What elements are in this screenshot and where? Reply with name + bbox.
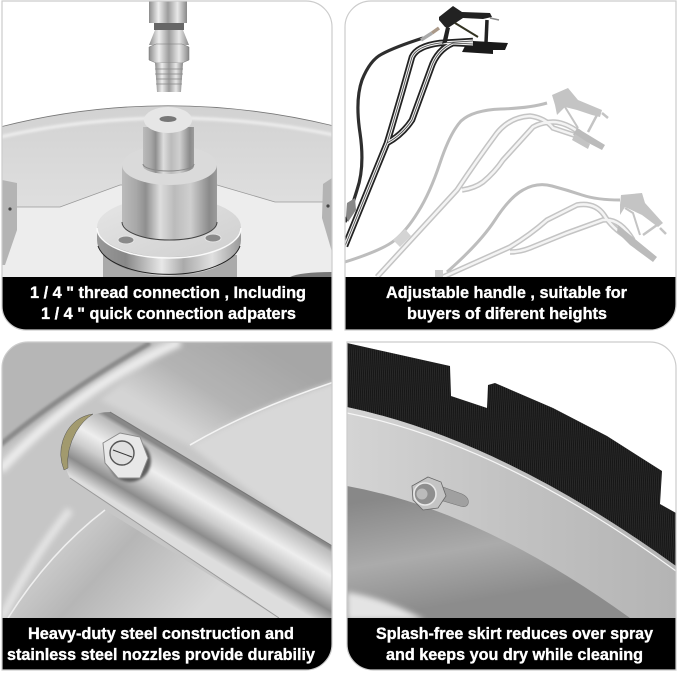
steel plate: [347, 407, 676, 620]
caption text: buyers of diferent heights: [407, 304, 607, 323]
left bracket: [2, 180, 17, 265]
caption text: [7, 624, 316, 664]
panel: adjustable handle: [345, 1, 676, 330]
caption text: Adjustable handle , suitable for: [386, 283, 628, 302]
caption bar: [2, 618, 332, 670]
caption bar: [345, 277, 676, 330]
brass end cap: [61, 414, 93, 470]
nozzle: [103, 433, 151, 482]
panel: splash-free skirt: [347, 342, 676, 670]
quick connect fitting: [149, 1, 189, 92]
right bracket: [322, 178, 332, 252]
black handle: [345, 6, 508, 246]
disc body: [0, 106, 334, 280]
caption bar: [2, 277, 332, 330]
slot: [440, 487, 468, 507]
faded handle low: [435, 185, 666, 277]
steel background: [0, 340, 340, 625]
faded handle middle: [345, 88, 608, 277]
caption text: Heavy-duty steel construction and: [28, 624, 294, 643]
panel: thread connection: [0, 1, 334, 330]
caption bar: [347, 618, 676, 670]
caption text: [386, 283, 628, 323]
caption text: stainless steel nozzles provide durabiliy: [7, 645, 316, 664]
inner disc: [347, 486, 630, 618]
caption text: 1 / 4 " thread connection , Including: [30, 283, 306, 302]
caption text: [30, 283, 306, 323]
bolt: [412, 477, 446, 510]
caption text: and keeps you dry while cleaning: [386, 645, 643, 664]
caption text: 1 / 4 " quick connection adpaters: [41, 304, 296, 323]
small cylinder with port: [143, 107, 194, 174]
caption text: [376, 624, 654, 664]
tube: [66, 412, 334, 620]
panel: steel construction: [0, 340, 340, 670]
flange: [96, 204, 242, 277]
large cylinder: [122, 166, 218, 240]
black bristle skirt: [348, 343, 676, 566]
disc highlight: [347, 592, 425, 620]
caption text: Splash-free skirt reduces over spray: [376, 624, 654, 643]
